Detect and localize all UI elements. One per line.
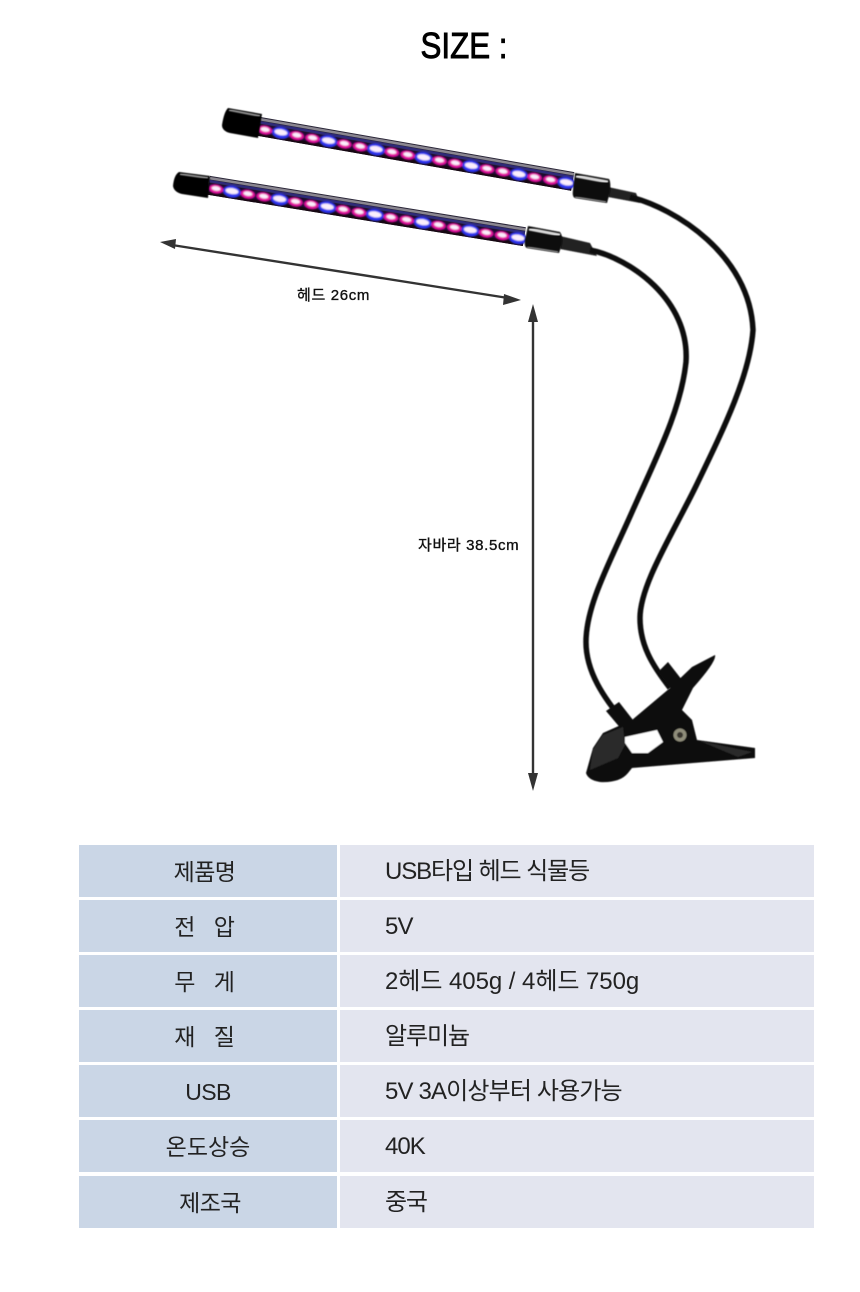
row label: material: 재 질 [174, 1024, 235, 1050]
title: SIZE : [420, 25, 508, 66]
icon: black clip base [586, 655, 755, 782]
row label: country of origin: 제조국 [179, 1190, 241, 1216]
row value: voltage [340, 900, 814, 952]
row value: material [340, 1010, 814, 1062]
cable: rear gooseneck [608, 187, 753, 688]
row label: product name: 제품명 [174, 859, 235, 885]
lamp head: front LED bar [173, 172, 562, 253]
row label: country of origin [79, 1176, 337, 1228]
row value: product name [340, 845, 814, 897]
row value: product name: USB타입 헤드 식물등 [385, 858, 589, 885]
row value: country of origin: 중국 [385, 1189, 427, 1216]
LED tube rear [256, 117, 577, 191]
lamp illustration with dimension arrows [160, 107, 757, 791]
collar front [525, 226, 562, 253]
label: head length: 헤드 26cm [297, 287, 370, 304]
end cap rear [222, 108, 262, 138]
arrow: head width [160, 239, 521, 305]
label: arm length: 자바라 38.5cm [418, 537, 519, 554]
row label: weight: 무 게 [174, 969, 235, 995]
lamp head: rear LED bar [222, 108, 610, 203]
row label: material [79, 1010, 337, 1062]
row value: voltage: 5V [385, 913, 413, 940]
row value: temperature rise [340, 1120, 814, 1172]
row label: voltage: 전 압 [174, 914, 235, 940]
arrow: arm length [528, 304, 538, 791]
row label: weight [79, 955, 337, 1007]
cable: front gooseneck [560, 236, 686, 722]
row label: temperature rise [79, 1120, 337, 1172]
end cap front [173, 172, 210, 198]
row value: temperature rise: 40K [385, 1133, 425, 1160]
row value: USB: 5V 3A이상부터 사용가능 [385, 1078, 622, 1105]
row label: voltage [79, 900, 337, 952]
row value: material: 알루미늄 [385, 1023, 469, 1050]
row value: USB [340, 1065, 814, 1117]
row label: USB [79, 1065, 337, 1117]
row label: USB: USB [185, 1079, 231, 1105]
LED tube front [207, 176, 529, 247]
row label: product name [79, 845, 337, 897]
row label: temperature rise: 온도상승 [166, 1134, 250, 1160]
row value: weight [340, 955, 814, 1007]
spec table [79, 845, 814, 1228]
collar rear [573, 173, 610, 203]
row value: country of origin [340, 1176, 814, 1228]
row value: weight: 2헤드 405g / 4헤드 750g [385, 968, 639, 995]
